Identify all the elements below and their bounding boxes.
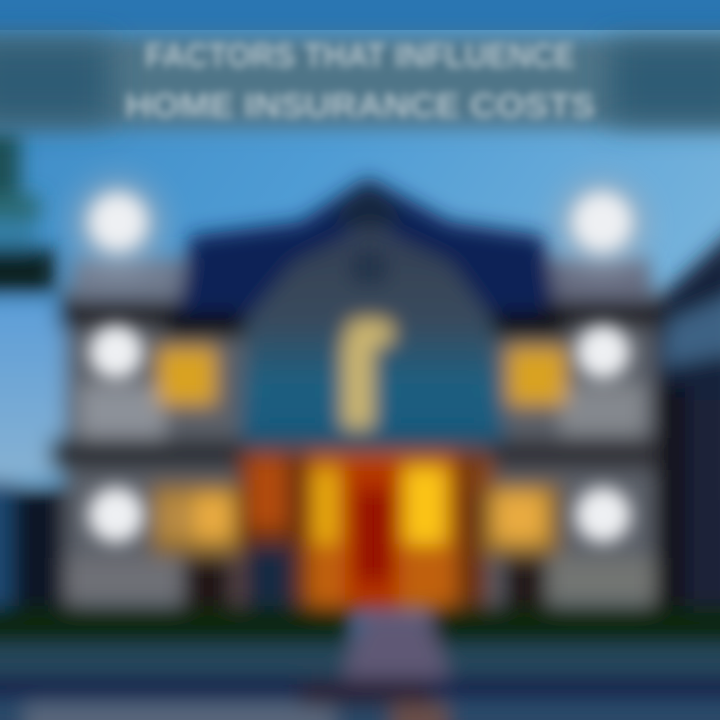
- porch side posts: [248, 458, 494, 528]
- wall bands: [50, 258, 665, 604]
- central gable: [240, 225, 505, 445]
- roof: [175, 178, 555, 332]
- front door: [308, 455, 456, 610]
- light halos: [74, 181, 646, 269]
- background sky: [0, 0, 720, 500]
- left tree: [0, 130, 55, 294]
- title text: HOME INSURANCE COSTS: [125, 87, 595, 125]
- path and street: [0, 615, 720, 720]
- lower window surrounds: [152, 484, 560, 556]
- title text: [125, 37, 595, 125]
- right neighbouring house: [635, 225, 720, 620]
- lawn: [0, 606, 720, 644]
- upper windows: [158, 348, 566, 405]
- lower windows: [157, 492, 546, 542]
- gable window: [343, 320, 393, 428]
- gable vent: [352, 252, 386, 284]
- main wall: [65, 285, 655, 605]
- glowing lights: [88, 192, 632, 543]
- porch: [238, 450, 488, 605]
- title banner: [0, 36, 720, 128]
- left sky patch and dark shrub: [0, 302, 80, 608]
- title text: FACTORS THAT INFLUENCE: [145, 37, 575, 75]
